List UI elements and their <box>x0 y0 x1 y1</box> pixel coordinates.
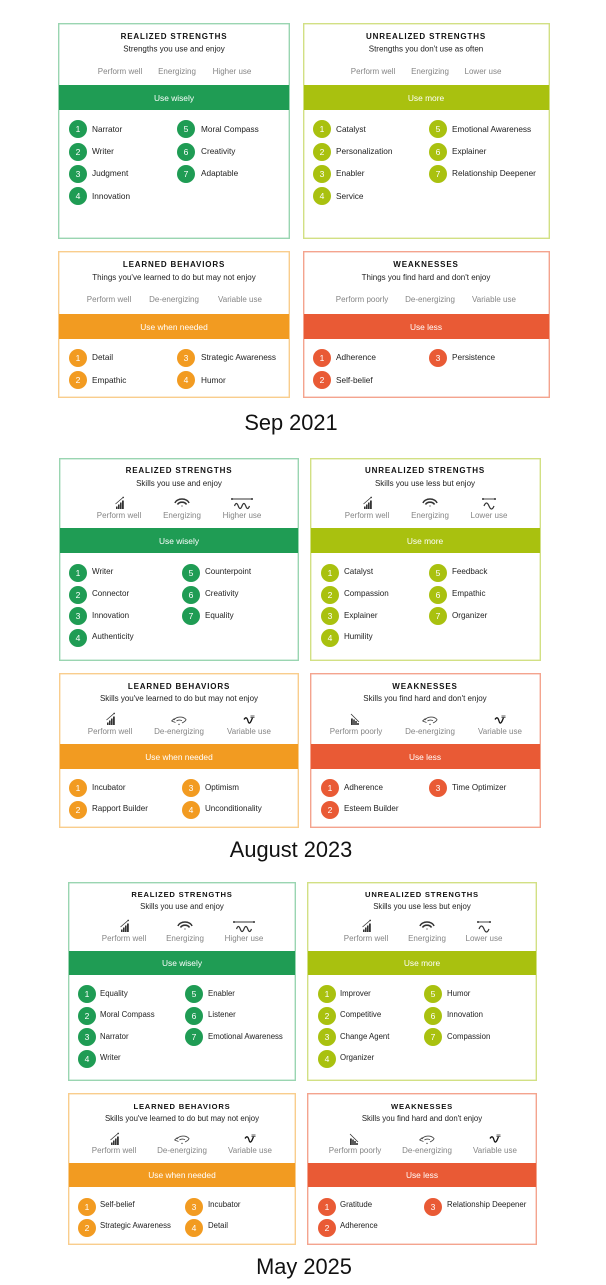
panel: realized strengths 2023: Skills you use and enjoy <box>136 479 222 488</box>
icon: variable use <box>245 1135 256 1142</box>
panel: realized strengths 2025: Writer <box>100 1053 121 1062</box>
panel: unrealized strengths 2025: 5 <box>431 989 436 999</box>
panel: weaknesses 2021: Persistence <box>452 353 496 362</box>
icon: de-energizing <box>174 1136 189 1144</box>
panel: realized strengths 2023: Connector <box>92 589 129 598</box>
date label: Sep 2021: Sep 2021 <box>244 410 338 435</box>
panel: weaknesses 2025: Gratitude <box>340 1200 372 1209</box>
panel: realized strengths 2021: Perform well <box>98 67 142 76</box>
panel: weaknesses 2025: Perform poorly <box>329 1146 381 1155</box>
panel: realized strengths 2023: Authenticity <box>92 632 134 641</box>
icon: variable use <box>490 1135 500 1142</box>
panel: unrealized strengths 2023: Organizer <box>452 611 488 620</box>
panel: unrealized strengths 2025: 4 <box>325 1054 330 1064</box>
panel: learned behaviors 2023: Skills you've learned to do but may not enjoy <box>100 694 258 703</box>
panel: learned behaviors 2023 <box>60 674 298 827</box>
panel: weaknesses 2025 <box>308 1094 536 1244</box>
panel: realized strengths 2021: Innovation <box>92 192 130 201</box>
panel: unrealized strengths 2023: Humility <box>344 632 373 641</box>
panel: realized strengths 2025: 7 <box>192 1032 197 1042</box>
panel: unrealized strengths 2023: Use more <box>407 536 443 546</box>
panel: unrealized strengths 2021: Enabler <box>336 169 365 178</box>
date label: August 2023: August 2023 <box>230 837 352 862</box>
panel: learned behaviors 2023: LEARNED BEHAVIORS <box>128 682 230 691</box>
panel: unrealized strengths 2025: Perform well <box>344 934 388 943</box>
icon: perform poorly <box>350 1134 358 1145</box>
panel: realized strengths 2025: Perform well <box>102 934 146 943</box>
panel: unrealized strengths 2023: 1 <box>328 568 333 578</box>
panel: learned behaviors 2025: 3 <box>192 1202 197 1212</box>
panel: realized strengths 2021 <box>59 24 289 238</box>
panel: learned behaviors 2023: Unconditionality <box>205 804 262 813</box>
panel: weaknesses 2021: 2 <box>320 375 325 385</box>
panel: realized strengths 2025: 6 <box>192 1011 197 1021</box>
panel: weaknesses 2023: Adherence <box>344 783 383 792</box>
panel: realized strengths 2025: 1 <box>85 989 90 999</box>
panel: weaknesses 2023: Esteem Builder <box>344 804 399 813</box>
panel: weaknesses 2021: De-energizing <box>405 295 455 304</box>
panel: realized strengths 2023: 7 <box>189 611 194 621</box>
panel: unrealized strengths 2021: Catalyst <box>336 125 367 134</box>
panel: weaknesses 2023: Use less <box>409 752 441 762</box>
panel: learned behaviors 2025: Skills you've learned to do but may not enjoy <box>105 1114 259 1123</box>
panel: learned behaviors 2021 <box>59 252 289 397</box>
panel: weaknesses 2021: Variable use <box>472 295 516 304</box>
panel: weaknesses 2025: Relationship Deepener <box>447 1200 527 1209</box>
panel: weaknesses 2025: 2 <box>325 1223 330 1233</box>
panel: weaknesses 2023: 2 <box>328 805 333 815</box>
icon: de-energizing <box>420 1136 434 1144</box>
panel: unrealized strengths 2025: 7 <box>431 1032 436 1042</box>
panel: unrealized strengths 2023: 3 <box>328 611 333 621</box>
panel: unrealized strengths 2023: UNREALIZED STRENGTHS <box>365 466 485 475</box>
icon: variable use <box>244 716 254 723</box>
panel: unrealized strengths 2025: Lower use <box>466 934 503 943</box>
panel: learned behaviors 2021: Variable use <box>218 295 262 304</box>
panel: learned behaviors 2025: LEARNED BEHAVIORS <box>134 1102 230 1111</box>
panel: unrealized strengths 2023: Explainer <box>344 611 378 620</box>
panel: learned behaviors 2021: Use when needed <box>140 322 208 332</box>
panel: realized strengths 2023: 2 <box>76 590 81 600</box>
panel: learned behaviors 2021: Things you've learned to do but may not enjoy <box>92 273 256 282</box>
panel: realized strengths 2023: Equality <box>205 611 234 620</box>
panel: realized strengths 2021: Moral Compass <box>201 125 259 134</box>
panel: weaknesses 2021: WEAKNESSES <box>393 260 459 269</box>
icon: lower use <box>482 498 496 509</box>
panel: weaknesses 2021: Perform poorly <box>336 295 388 304</box>
panel: realized strengths 2023: Writer <box>92 567 114 576</box>
panel: unrealized strengths 2025: UNREALIZED STRENGTHS <box>365 890 479 899</box>
panel: learned behaviors 2023: Rapport Builder <box>92 804 148 813</box>
panel: weaknesses 2025: Use less <box>406 1170 438 1180</box>
panel: realized strengths 2021: 5 <box>184 124 189 134</box>
panel: learned behaviors 2021: 1 <box>76 353 81 363</box>
panel: realized strengths 2021: 4 <box>76 191 81 201</box>
panel: realized strengths 2025: Higher use <box>225 934 264 943</box>
panel: unrealized strengths 2025: 1 <box>325 989 330 999</box>
panel: realized strengths 2021: Writer <box>92 147 114 156</box>
panel: learned behaviors 2023: Optimism <box>205 783 239 792</box>
panel: weaknesses 2025: WEAKNESSES <box>391 1102 453 1111</box>
panel: realized strengths 2021: 2 <box>76 147 81 157</box>
panel: realized strengths 2023: Energizing <box>163 511 201 520</box>
panel: unrealized strengths 2023: 6 <box>436 590 441 600</box>
panel: learned behaviors 2023: 4 <box>189 805 194 815</box>
panel: unrealized strengths 2021: 6 <box>436 147 441 157</box>
panel: realized strengths 2025: Listener <box>208 1010 236 1019</box>
panel: realized strengths 2025: 2 <box>85 1011 90 1021</box>
panel: unrealized strengths 2021: Use more <box>408 93 444 103</box>
panel: weaknesses 2023: Perform poorly <box>330 727 382 736</box>
panel: learned behaviors 2025: Incubator <box>208 1200 241 1209</box>
panel: learned behaviors 2021: LEARNED BEHAVIORS <box>123 260 225 269</box>
panel: unrealized strengths 2021: UNREALIZED STRENGTHS <box>366 32 486 41</box>
panel: unrealized strengths 2023: Lower use <box>471 511 508 520</box>
panel: realized strengths 2023: Creativity <box>205 589 239 598</box>
panel: unrealized strengths 2021: Energizing <box>411 67 449 76</box>
panel: unrealized strengths 2025 <box>308 883 536 1080</box>
panel: weaknesses 2021: Self-belief <box>336 376 373 385</box>
panel: unrealized strengths 2023: Feedback <box>452 567 488 576</box>
panel: realized strengths 2023: Counterpoint <box>205 567 252 576</box>
panel: learned behaviors 2021: Detail <box>92 353 113 362</box>
panel: learned behaviors 2025: 1 <box>85 1202 90 1212</box>
panel: weaknesses 2021 <box>304 252 549 397</box>
panel: unrealized strengths 2025: Use more <box>404 958 440 968</box>
panel: learned behaviors 2025: Variable use <box>228 1146 272 1155</box>
panel: unrealized strengths 2021: 7 <box>436 169 441 179</box>
panel: learned behaviors 2025: Use when needed <box>148 1170 216 1180</box>
panel: realized strengths 2021: Energizing <box>158 67 196 76</box>
panel: weaknesses 2025: De-energizing <box>402 1146 452 1155</box>
icon: de-energizing <box>422 717 437 725</box>
panel: unrealized strengths 2021: Emotional Awareness <box>452 125 531 134</box>
panel: learned behaviors 2021: Perform well <box>87 295 131 304</box>
panel: learned behaviors 2023: Perform well <box>88 727 132 736</box>
panel: unrealized strengths 2021: Explainer <box>452 147 487 156</box>
panel: unrealized strengths 2025: Innovation <box>447 1010 483 1019</box>
icon: perform well <box>116 497 124 509</box>
panel: weaknesses 2023: 3 <box>436 783 441 793</box>
panel: realized strengths 2025: Moral Compass <box>100 1010 155 1019</box>
section: May 2025 <box>69 883 536 1279</box>
panel: realized strengths 2023: 1 <box>76 568 81 578</box>
panel: learned behaviors 2021: Empathic <box>92 376 126 385</box>
panel: unrealized strengths 2025: Change Agent <box>340 1032 390 1041</box>
panel: weaknesses 2025: Variable use <box>473 1146 517 1155</box>
panel: realized strengths 2025: Enabler <box>208 989 235 998</box>
panel: learned behaviors 2025 <box>69 1094 295 1244</box>
panel: realized strengths 2021: 1 <box>76 124 81 134</box>
panel: learned behaviors 2021: 3 <box>184 353 189 363</box>
panel: realized strengths 2023: 6 <box>189 590 194 600</box>
date label: May 2025: May 2025 <box>256 1254 352 1279</box>
panel: unrealized strengths 2023: Catalyst <box>344 567 374 576</box>
panel: unrealized strengths 2025: Skills you use less but enjoy <box>373 902 471 911</box>
panel: unrealized strengths 2025: 3 <box>325 1032 330 1042</box>
panel: unrealized strengths 2021: Perform well <box>351 67 395 76</box>
panel: learned behaviors 2025: Perform well <box>92 1146 136 1155</box>
panel: weaknesses 2025: 3 <box>431 1202 436 1212</box>
icon: lower use <box>477 921 491 932</box>
panel: weaknesses 2021: Use less <box>410 322 442 332</box>
icon: perform well <box>120 920 129 932</box>
panel: learned behaviors 2025: Detail <box>208 1221 228 1230</box>
panel: learned behaviors 2023: 2 <box>76 805 81 815</box>
panel: learned behaviors 2023: Incubator <box>92 783 126 792</box>
icon: de-energizing <box>172 717 186 725</box>
panel: realized strengths 2025: 4 <box>85 1054 90 1064</box>
panel: realized strengths 2025: Equality <box>100 989 128 998</box>
icon: energizing <box>420 922 434 930</box>
panel: unrealized strengths 2023: 5 <box>436 568 441 578</box>
panel: unrealized strengths 2023: Compassion <box>344 589 389 598</box>
panel: weaknesses 2023: WEAKNESSES <box>392 682 458 691</box>
panel: unrealized strengths 2023: Energizing <box>411 511 449 520</box>
panel: realized strengths 2021: REALIZED STRENGTHS <box>121 32 227 41</box>
icon: higher use <box>231 498 253 508</box>
panel: weaknesses 2023: Variable use <box>478 727 522 736</box>
panel: unrealized strengths 2023: Perform well <box>345 511 389 520</box>
panel: unrealized strengths 2021: 3 <box>320 169 325 179</box>
panel: unrealized strengths 2021: 4 <box>320 191 325 201</box>
panel: realized strengths 2021: 3 <box>76 169 81 179</box>
panel: weaknesses 2023: De-energizing <box>405 727 455 736</box>
section: Sep 2021 <box>59 24 549 435</box>
panel: realized strengths 2023: Perform well <box>97 511 141 520</box>
panel: learned behaviors 2025: De-energizing <box>157 1146 207 1155</box>
panel: learned behaviors 2025: Self-belief <box>100 1200 136 1209</box>
panel: unrealized strengths 2021: Lower use <box>465 67 502 76</box>
panel: unrealized strengths 2023: Empathic <box>452 589 486 598</box>
panel: unrealized strengths 2023 <box>311 459 540 660</box>
panel: weaknesses 2021: Adherence <box>336 353 376 362</box>
panel: learned behaviors 2023: Variable use <box>227 727 271 736</box>
panel: realized strengths 2021: Higher use <box>213 67 252 76</box>
panel: learned behaviors 2021: Strategic Awareness <box>201 353 276 362</box>
panel: learned behaviors 2023: Use when needed <box>145 752 213 762</box>
panel: realized strengths 2023: 3 <box>76 611 81 621</box>
panel: learned behaviors 2021: Humor <box>201 376 226 385</box>
panel: unrealized strengths 2021: Strengths you don't use as often <box>369 44 483 54</box>
panel: realized strengths 2023 <box>60 459 298 660</box>
panel: unrealized strengths 2025: Energizing <box>408 934 446 943</box>
panel: unrealized strengths 2021: 1 <box>320 124 325 134</box>
panel: weaknesses 2025: 1 <box>325 1202 330 1212</box>
panel: weaknesses 2023: 1 <box>328 783 333 793</box>
icon: perform well <box>364 497 372 509</box>
panel: weaknesses 2021: Things you find hard and don't enjoy <box>362 273 490 282</box>
panel: unrealized strengths 2021 <box>304 24 549 238</box>
panel: realized strengths 2025: Skills you use and enjoy <box>140 902 224 911</box>
icon: perform well <box>110 1133 119 1145</box>
panel: realized strengths 2021: 6 <box>184 147 189 157</box>
panel: realized strengths 2023: 4 <box>76 633 81 643</box>
panel: realized strengths 2023: 5 <box>189 568 194 578</box>
section: August 2023 <box>60 459 540 862</box>
panel: learned behaviors 2021: 4 <box>184 375 189 385</box>
panel: realized strengths 2025: REALIZED STRENGTHS <box>131 890 233 899</box>
panel: realized strengths 2025: 3 <box>85 1032 90 1042</box>
icon: energizing <box>423 499 437 507</box>
panel: realized strengths 2023: REALIZED STRENGTHS <box>126 466 232 475</box>
panel: realized strengths 2023: Use wisely <box>159 536 200 546</box>
panel: realized strengths 2023: Innovation <box>92 611 129 620</box>
panel: realized strengths 2025: Emotional Awareness <box>208 1032 283 1041</box>
icon: energizing <box>178 922 192 930</box>
panel: realized strengths 2021: Use wisely <box>154 93 195 103</box>
icon: perform poorly <box>351 714 359 725</box>
icon: higher use <box>233 921 255 932</box>
icon: perform well <box>106 713 115 725</box>
panel: realized strengths 2021: Judgment <box>92 169 129 178</box>
panel: unrealized strengths 2025: 2 <box>325 1011 330 1021</box>
panel: realized strengths 2025: 5 <box>192 989 197 999</box>
panel: weaknesses 2021: 1 <box>320 353 325 363</box>
panel: unrealized strengths 2023: Skills you use less but enjoy <box>375 479 475 488</box>
panel: weaknesses 2025: Adherence <box>340 1221 378 1230</box>
panel: learned behaviors 2023: 1 <box>76 783 81 793</box>
panel: learned behaviors 2021: De-energizing <box>149 295 199 304</box>
panel: weaknesses 2025: Skills you find hard and don't enjoy <box>362 1114 482 1123</box>
icon: variable use <box>495 716 506 723</box>
panel: learned behaviors 2023: 3 <box>189 783 194 793</box>
panel: realized strengths 2025: Use wisely <box>162 958 203 968</box>
panel: unrealized strengths 2021: Service <box>336 192 364 201</box>
panel: unrealized strengths 2021: 5 <box>436 124 441 134</box>
panel: realized strengths 2021: 7 <box>184 169 189 179</box>
panel: learned behaviors 2025: Strategic Awareness <box>100 1221 171 1230</box>
panel: learned behaviors 2025: 2 <box>85 1223 90 1233</box>
panel: learned behaviors 2023: De-energizing <box>154 727 204 736</box>
panel: unrealized strengths 2025: Humor <box>447 989 471 998</box>
panel: unrealized strengths 2025: Compassion <box>447 1032 490 1041</box>
panel: unrealized strengths 2021: Personalization <box>336 147 393 156</box>
panel: unrealized strengths 2021: Relationship Deepener <box>452 169 536 178</box>
panel: realized strengths 2021: Narrator <box>92 125 123 134</box>
panel: weaknesses 2023: Skills you find hard and don't enjoy <box>363 694 487 703</box>
panel: realized strengths 2021: Strengths you use and enjoy <box>123 44 225 54</box>
icon: energizing <box>175 499 189 507</box>
panel: unrealized strengths 2025: Improver <box>340 989 371 998</box>
panel: weaknesses 2023: Time Optimizer <box>452 783 507 792</box>
panel: realized strengths 2025 <box>69 883 295 1080</box>
panel: unrealized strengths 2025: Competitive <box>340 1010 381 1019</box>
panel: realized strengths 2021: Adaptable <box>201 169 239 178</box>
panel: realized strengths 2023: Higher use <box>223 511 262 520</box>
panel: weaknesses 2023 <box>311 674 540 827</box>
icon: perform well <box>362 920 371 932</box>
panel: realized strengths 2021: Creativity <box>201 147 236 156</box>
panel: realized strengths 2025: Narrator <box>100 1032 129 1041</box>
panel: learned behaviors 2021: 2 <box>76 375 81 385</box>
panel: unrealized strengths 2025: 6 <box>431 1011 436 1021</box>
panel: realized strengths 2025: Energizing <box>166 934 204 943</box>
panel: unrealized strengths 2025: Organizer <box>340 1053 375 1062</box>
panel: unrealized strengths 2023: 2 <box>328 590 333 600</box>
panel: learned behaviors 2025: 4 <box>192 1223 197 1233</box>
panel: weaknesses 2021: 3 <box>436 353 441 363</box>
panel: unrealized strengths 2021: 2 <box>320 147 325 157</box>
panel: unrealized strengths 2023: 7 <box>436 611 441 621</box>
panel: unrealized strengths 2023: 4 <box>328 633 333 643</box>
